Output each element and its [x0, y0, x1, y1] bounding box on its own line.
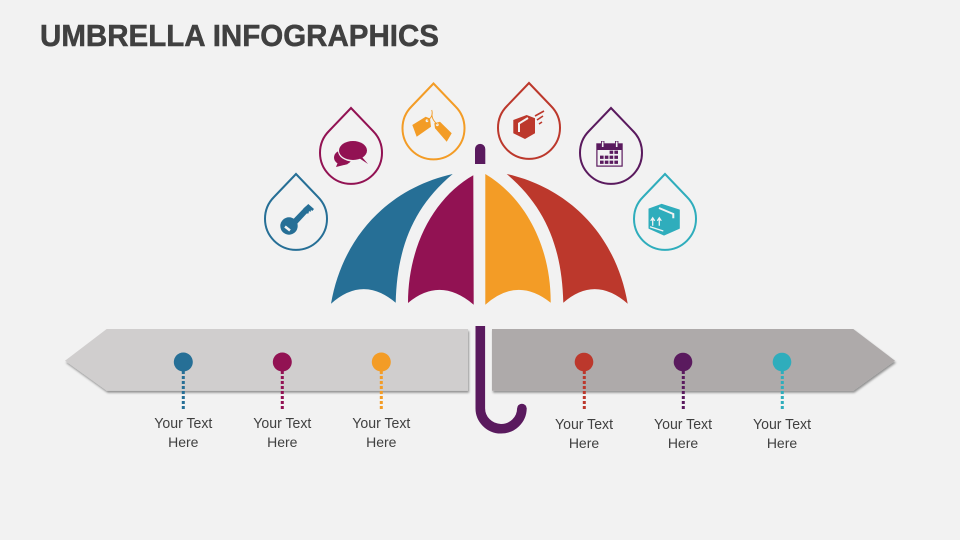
marker: item 5: Your Text [654, 416, 713, 433]
icon drop: moving parcel [498, 83, 560, 159]
marker: item 4: Here [569, 435, 599, 451]
icon: price tags [412, 110, 452, 142]
icon: calendar [596, 141, 623, 167]
icon drop: chat [320, 108, 382, 184]
marker: item 6: Your Text [753, 416, 812, 433]
icon: speech bubbles [334, 140, 368, 167]
marker: item 4: Your Text [555, 416, 614, 433]
canopy panel: blue [331, 174, 453, 304]
left arrow banner [65, 329, 468, 391]
icon drop: key [265, 174, 327, 250]
marker: item 5 [654, 353, 713, 451]
canopy panel: orange [485, 174, 551, 305]
marker: item 4 [555, 353, 614, 451]
marker: item 2: Your Text [253, 415, 312, 432]
icon drop: calendar [580, 108, 642, 184]
marker: item 1: Your Text [154, 415, 213, 432]
marker: item 6: Here [767, 435, 797, 451]
marker: item 3: Here [366, 434, 397, 450]
marker: item 3: Your Text [352, 415, 411, 432]
canopy panel: red [507, 174, 628, 304]
icon drop: price tags [402, 84, 464, 159]
right arrow banner [492, 329, 895, 391]
marker: item 6 [753, 353, 812, 451]
handle hook end [517, 404, 527, 413]
umbrella canopy [331, 174, 628, 305]
icon drop: box [634, 174, 696, 250]
marker: item 5: Here [668, 435, 698, 451]
marker: item 3 [352, 352, 411, 450]
marker: item 1: Here [168, 434, 199, 450]
icon: moving parcel [513, 111, 544, 139]
canopy panel: magenta [408, 175, 474, 305]
marker: item 2: Here [267, 434, 298, 450]
marker: item 2 [253, 352, 312, 450]
icon: key [280, 204, 314, 235]
title: UMBRELLA INFOGRAPHICS [40, 18, 439, 53]
marker: item 1 [154, 352, 213, 450]
umbrella tip [475, 144, 485, 164]
umbrella handle [480, 326, 522, 429]
icon: box with up arrows [649, 204, 679, 235]
